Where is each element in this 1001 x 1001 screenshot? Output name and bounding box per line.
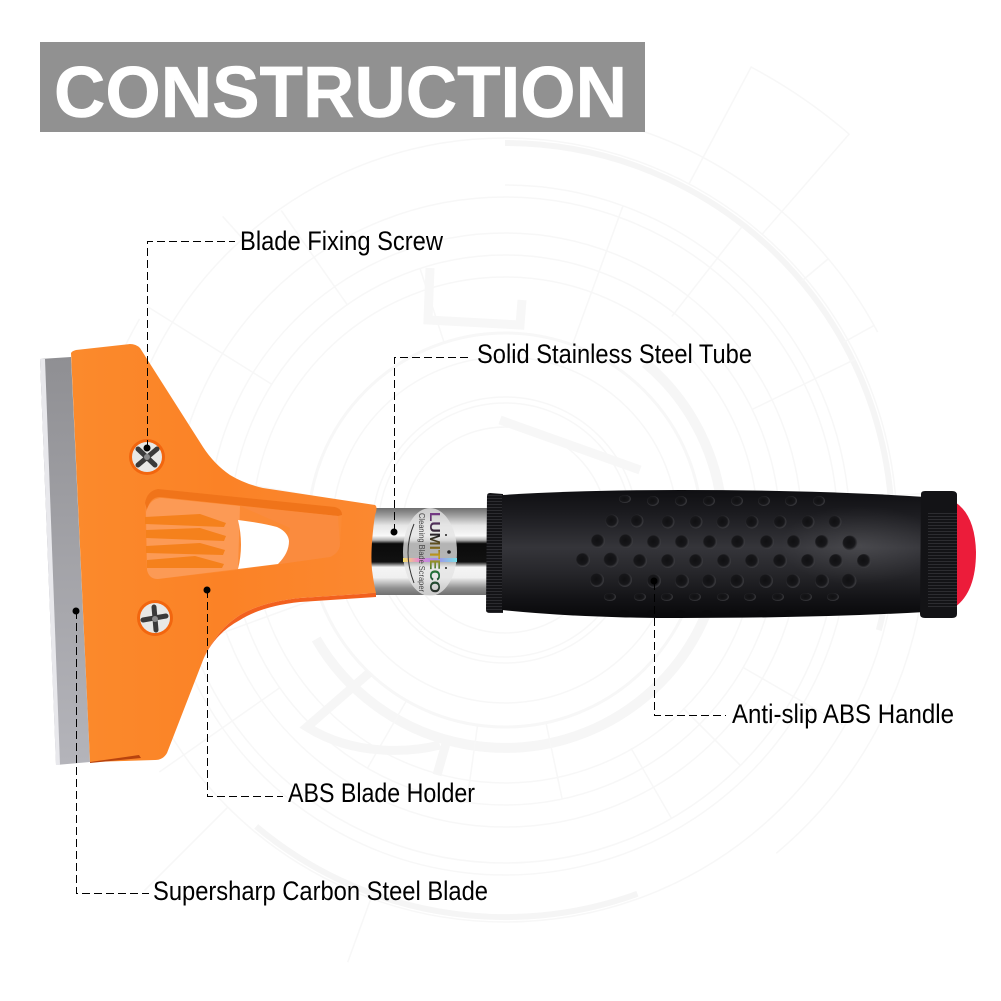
- label: blade fixing screw: Blade Fixing Screw: [240, 226, 443, 256]
- brand sticker: Cleaning Blade Scraper: [417, 513, 427, 592]
- orange ABS blade holder: [71, 344, 376, 763]
- label: solid stainless steel tube: Solid Stainless Steel Tube: [477, 339, 752, 369]
- background: concentric technical pattern: [83, 66, 925, 962]
- leader: blade holder: [204, 586, 283, 796]
- icon: top blade fixing screw: [129, 439, 165, 475]
- scraper blade: [40, 357, 90, 765]
- rear ribbed collar: [920, 491, 957, 618]
- leader: blade fixing screw: [144, 242, 235, 452]
- grip ribs: [145, 514, 226, 568]
- front ribbed collar: [486, 493, 503, 613]
- grip body: [502, 490, 925, 618]
- anti-slip ABS handle: [486, 490, 976, 618]
- brand sticker: LUMITECO: [426, 512, 442, 593]
- brand sticker: [403, 508, 457, 596]
- icon: bottom blade fixing screw: [137, 600, 173, 636]
- leader: stainless steel tube: [390, 358, 472, 536]
- dimple texture: [576, 495, 871, 616]
- label: anti-slip ABS handle: Anti-slip ABS Handle: [732, 699, 954, 729]
- label: supersharp carbon steel blade: Supersharp Carbon Steel Blade: [153, 876, 488, 906]
- red end cap: [955, 502, 976, 607]
- grip recess: [145, 489, 342, 579]
- triangular handle window: [238, 520, 289, 569]
- leader: carbon steel blade: [72, 608, 149, 894]
- title banner: CONSTRUCTION: [54, 53, 627, 133]
- label: ABS blade holder: ABS Blade Holder: [288, 778, 475, 808]
- stainless steel tube: [368, 508, 490, 596]
- leader: anti-slip handle: [650, 578, 726, 716]
